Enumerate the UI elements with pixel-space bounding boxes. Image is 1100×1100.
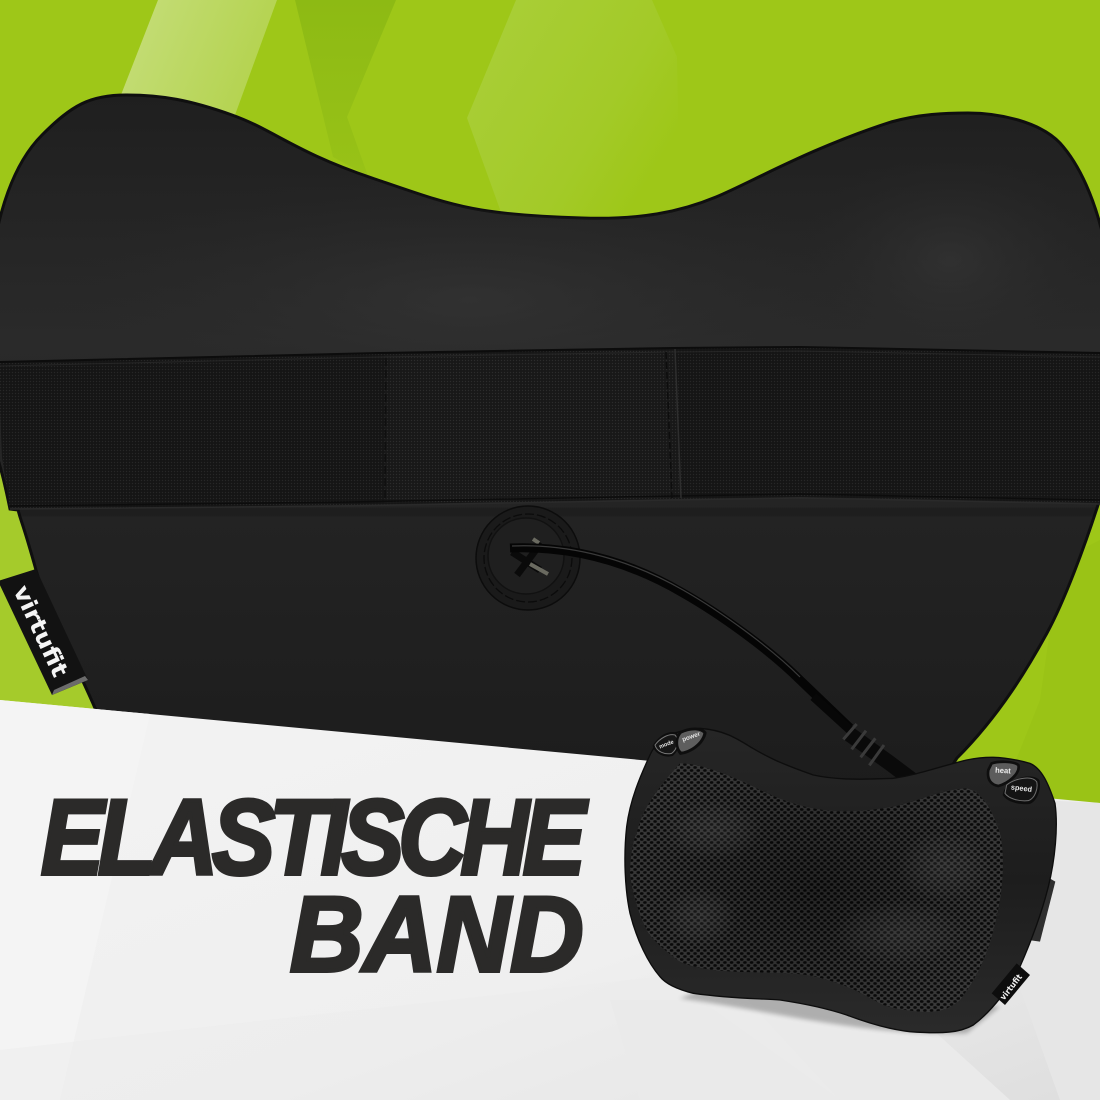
- back strap: [1028, 877, 1055, 942]
- button: mode: mode: [659, 739, 675, 751]
- small virtufit tag: virtufit: [998, 972, 1024, 1002]
- pillow body: [625, 728, 1056, 1033]
- button: mode: [653, 732, 680, 757]
- large pillow, back view: [0, 95, 1100, 800]
- button: heat: heat: [995, 766, 1012, 776]
- green background: [0, 0, 1100, 830]
- title line 2: BAND: [290, 876, 584, 995]
- elastic band: [0, 347, 1100, 509]
- power cable: [510, 546, 850, 728]
- button: heat: [988, 762, 1019, 786]
- virtufit label tag: [0, 569, 88, 695]
- band centre overlap: [385, 350, 680, 503]
- cord strain relief: [813, 697, 917, 783]
- title: Elastische band: [41, 778, 588, 995]
- small virtufit tag: [992, 963, 1030, 1005]
- light diagonal stripe: [119, 0, 277, 115]
- button: speed: [1003, 776, 1040, 804]
- virtufit label tag: virtufit: [8, 582, 73, 681]
- small massage pillow, front view: [625, 697, 1056, 1034]
- button: speed: speed: [1010, 782, 1033, 794]
- white lower panel: [0, 700, 1100, 1100]
- cable port button: [476, 506, 580, 610]
- mesh panel: [630, 763, 1003, 1012]
- button: power: power: [681, 730, 702, 744]
- title line 1: ELASTISCHE: [41, 778, 588, 897]
- pillow highlight: [0, 150, 1100, 515]
- button: power: [676, 728, 707, 755]
